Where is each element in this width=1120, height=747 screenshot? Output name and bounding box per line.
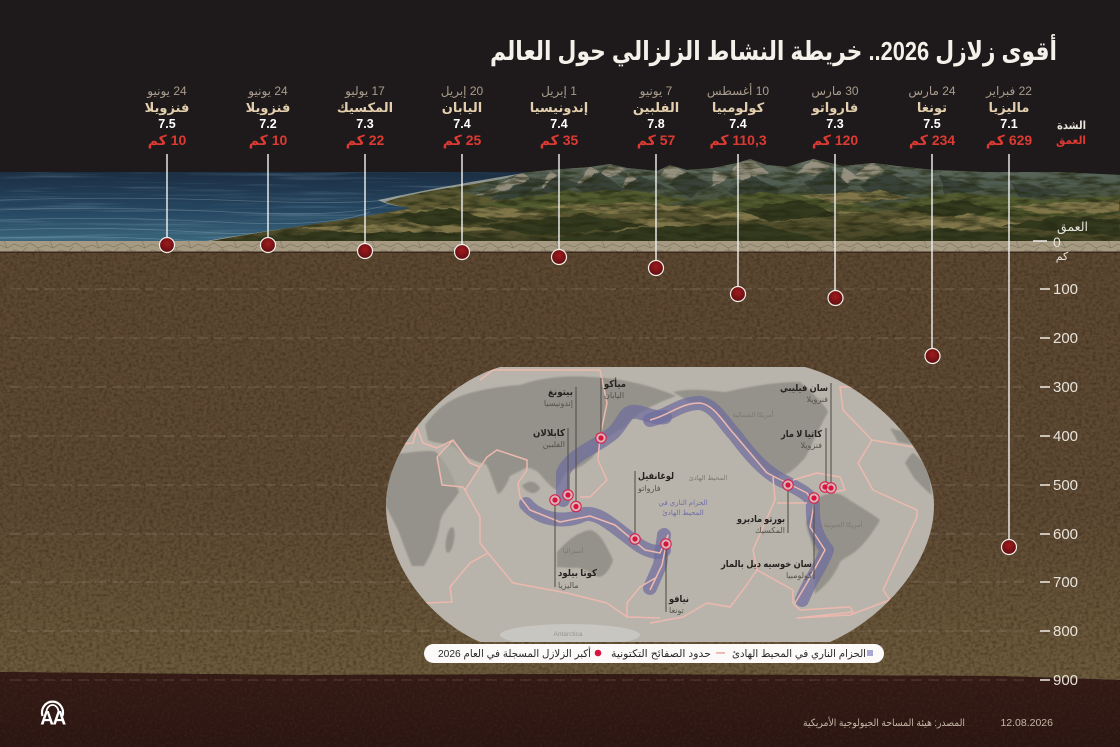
map label: San Felipe bbox=[780, 383, 828, 404]
belt caption: المحيط الهادئ bbox=[662, 510, 704, 517]
source: المصدر: هيئة المساحة الجيولوجية الأمريكية bbox=[803, 716, 965, 729]
event: Venezuela 24 June 7.2: فنزويلا bbox=[246, 100, 290, 115]
map label: Kabalalan: الفلبين bbox=[543, 440, 565, 449]
event: Vanuatu: فارواتو bbox=[811, 100, 858, 115]
event: Venezuela 24 June 7.5: 10 كم bbox=[148, 132, 187, 148]
crust strip bbox=[0, 241, 1120, 253]
event: Indonesia: 35 كم bbox=[540, 132, 579, 148]
map label: Kota Belud: كوتا بيلود bbox=[558, 568, 597, 579]
event: Mexico: 17 يوليو bbox=[344, 84, 385, 99]
event: Venezuela 24 June 7.2: 24 يونيو bbox=[247, 84, 288, 99]
event: Venezuela 24 June 7.2 bbox=[246, 84, 290, 252]
antarctica bbox=[500, 624, 640, 642]
map label: Bitung: إندونيسيا bbox=[544, 399, 573, 409]
event: Japan bbox=[441, 84, 484, 260]
pacific ring of fire belt bbox=[526, 403, 827, 600]
mountain facets bbox=[475, 159, 885, 197]
event: Japan: اليابان bbox=[442, 100, 482, 115]
map label: Catia la Mar: كاتيا لا مار bbox=[780, 429, 822, 440]
event: Venezuela 24 June 7.5: فنزويلا bbox=[145, 100, 189, 115]
map region names: أستراليا bbox=[563, 546, 583, 555]
tectonic plate boundaries bbox=[380, 370, 917, 623]
event: Tonga: تونغا bbox=[917, 100, 947, 115]
event: Malaysia: 22 فبراير bbox=[985, 84, 1032, 99]
depth axis: 700 bbox=[1053, 574, 1078, 591]
depth axis: 400 bbox=[1053, 428, 1078, 445]
map region names bbox=[554, 410, 862, 638]
event: Mexico bbox=[337, 84, 393, 258]
title: أقوى زلازل 2026.. خريطة النشاط الزلزالي حول العالم bbox=[490, 34, 1057, 67]
continents bbox=[380, 376, 932, 594]
event: Vanuatu bbox=[811, 84, 859, 306]
event: Indonesia: إندونيسيا bbox=[530, 100, 588, 115]
legend bbox=[424, 644, 884, 663]
map label: Puerto Madero bbox=[736, 514, 785, 535]
event: Venezuela 24 June 7.5 bbox=[145, 84, 189, 252]
event: Tonga: 234 كم bbox=[909, 132, 955, 148]
deep mantle layer bbox=[0, 672, 1120, 747]
event: Malaysia: 629 كم bbox=[986, 132, 1032, 148]
event: Indonesia: 7.4 bbox=[550, 117, 568, 131]
event: Vanuatu: 7.3 bbox=[826, 117, 844, 131]
logo: AA: AA bbox=[40, 708, 66, 730]
map label: San Felipe: فنزويلا bbox=[806, 395, 828, 404]
event: Philippines: 57 كم bbox=[637, 132, 676, 148]
map label: San Jose del Mar: كولومبيا bbox=[786, 571, 812, 580]
map label: San Jose del Mar: سان خوسيه ديل بالمار bbox=[720, 559, 812, 570]
map label: Nuku'alofa Tonga: تونغا bbox=[669, 606, 684, 615]
map label: Kabalalan: كابلالان bbox=[533, 428, 565, 439]
belt caption: الحزام الناري في bbox=[658, 500, 708, 507]
event: Colombia: 110,3 كم bbox=[709, 132, 767, 148]
map label: Bitung: بيتونغ bbox=[548, 387, 573, 398]
depth axis: 800 bbox=[1053, 623, 1078, 640]
depth axis: 900 bbox=[1053, 672, 1078, 689]
map callout lines bbox=[555, 378, 831, 612]
event: Malaysia: 7.1 bbox=[1000, 117, 1018, 131]
event: Tonga: 7.5 bbox=[923, 117, 941, 131]
depth axis: 100 bbox=[1053, 281, 1078, 298]
date: 12.08.2026 bbox=[1000, 717, 1053, 729]
event: Japan: 20 إبريل bbox=[441, 84, 484, 99]
event: Tonga: 24 مارس bbox=[908, 84, 956, 99]
depth axis: العمق bbox=[1057, 220, 1088, 235]
event: Indonesia bbox=[530, 84, 588, 264]
map label: Miyako: اليابان bbox=[604, 391, 624, 400]
map label: Catia la Mar: فنزويلا bbox=[800, 441, 822, 450]
depth axis: 500 bbox=[1053, 477, 1078, 494]
background: night sky band bbox=[0, 0, 1120, 175]
depth axis: 200 bbox=[1053, 330, 1078, 347]
event: Malaysia: ماليزيا bbox=[989, 100, 1029, 115]
event: Venezuela 24 June 7.2: 7.2 bbox=[259, 117, 277, 131]
landscape: sea and mountains bbox=[0, 155, 1120, 245]
map label: San Felipe: سان فيليبي bbox=[780, 383, 828, 394]
row labels: magnitude and depth bbox=[1056, 120, 1086, 147]
event: Colombia: 7.4 bbox=[729, 117, 747, 131]
depth axis: كم bbox=[1056, 251, 1069, 263]
event: Japan: 25 كم bbox=[443, 132, 482, 148]
event: Malaysia bbox=[985, 84, 1032, 554]
event: Mexico: 7.3 bbox=[356, 117, 374, 131]
arabia light plate bbox=[437, 440, 480, 488]
map label: San Jose del Mar bbox=[720, 559, 812, 580]
map label: Miyako: ميأكو bbox=[603, 377, 626, 390]
depth axis bbox=[1033, 220, 1088, 689]
event: Colombia bbox=[707, 83, 769, 302]
belt caption bbox=[658, 500, 708, 517]
depth grid dashes bbox=[10, 289, 1030, 680]
event: Tonga bbox=[908, 84, 956, 364]
event: Philippines: 7.8 bbox=[647, 117, 665, 131]
map label: Kota Belud bbox=[558, 568, 597, 590]
event: Colombia: كولومبيا bbox=[712, 100, 765, 115]
event: Mexico: المكسيك bbox=[337, 100, 393, 115]
event: Philippines: 7 يونيو bbox=[639, 84, 673, 99]
legend: الحزام الناري في المحيط الهادئ bbox=[732, 648, 866, 660]
map label: Kota Belud: ماليزيا bbox=[558, 581, 579, 590]
event: Indonesia: 1 إبريل bbox=[541, 84, 577, 99]
event: Venezuela 24 June 7.5: 7.5 bbox=[158, 117, 176, 131]
map label: Luganville bbox=[637, 471, 674, 493]
soil layer bbox=[0, 252, 1120, 680]
map label: Catia la Mar bbox=[780, 429, 822, 450]
map region names: Antarctica bbox=[554, 631, 583, 638]
event: Colombia: 10 أغسطس bbox=[707, 83, 769, 99]
map label: Nuku'alofa Tonga bbox=[668, 594, 689, 615]
row labels: magnitude and depth: الشدة bbox=[1057, 120, 1086, 132]
foothills and plains bbox=[478, 190, 1120, 215]
legend: حدود الصفائح التكتونية bbox=[611, 648, 711, 660]
map label: Puerto Madero: بورتو ماديرو bbox=[736, 514, 785, 525]
event: Vanuatu: 120 كم bbox=[812, 132, 858, 148]
soil highlights bbox=[0, 252, 1120, 747]
map label: Luganville: لوغانفيل bbox=[638, 471, 674, 482]
event: Japan: 7.4 bbox=[453, 117, 471, 131]
event: Vanuatu: 30 مارس bbox=[811, 84, 859, 99]
depth axis: 600 bbox=[1053, 526, 1078, 543]
event: Philippines: الفلبين bbox=[633, 100, 679, 115]
depth axis: 300 bbox=[1053, 379, 1078, 396]
event: Philippines bbox=[633, 84, 679, 276]
map label: Luganville: فارواتو bbox=[637, 484, 661, 493]
map label: Kabalalan bbox=[533, 428, 565, 449]
row labels: magnitude and depth: العمق bbox=[1056, 135, 1086, 147]
event: Mexico: 22 كم bbox=[346, 132, 385, 148]
map label: Miyako bbox=[603, 377, 626, 400]
map label: Nuku'alofa Tonga: نيافو bbox=[668, 594, 689, 605]
map region names: أمريكا الشمالية bbox=[733, 410, 774, 419]
event: Venezuela 24 June 7.5: 24 يونيو bbox=[146, 84, 187, 99]
map region names: المحيط الهادئ bbox=[689, 475, 727, 482]
map region names: أمريكا الجنوبية bbox=[824, 520, 862, 529]
soil texture bbox=[0, 252, 1120, 747]
event: Venezuela 24 June 7.2: 10 كم bbox=[249, 132, 288, 148]
legend: أكبر الزلازل المسجلة في العام 2026 bbox=[438, 646, 591, 660]
map label: Puerto Madero: المكسيك bbox=[755, 526, 785, 535]
depth axis: 0 bbox=[1053, 234, 1061, 250]
map markers bbox=[550, 433, 836, 549]
map label: Bitung bbox=[544, 387, 573, 409]
world map panel bbox=[380, 360, 940, 650]
